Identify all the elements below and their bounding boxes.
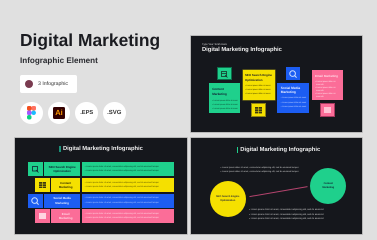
card heading: Marketing	[212, 92, 227, 96]
badge: SVG	[103, 102, 126, 124]
description: ▪ Lorem ipsum dolor sit amet, consectetur adipiscing elit, sed do eiusmod tempor	[85, 166, 159, 168]
card heading: Content	[212, 87, 224, 91]
label: Content	[60, 181, 71, 185]
card: Email Marketing	[312, 70, 343, 100]
subheading: Infographic Element: Infographic Element	[20, 56, 98, 65]
icon box	[28, 194, 43, 208]
text block: lower bullets: ▪ Lorem ipsum dolor sit amet, consectetur adipiscing elit, sed do eiusmod	[249, 209, 324, 211]
text block: lower bullets: ▪ Lorem ipsum dolor sit amet, consectetur adipiscing elit, sed do eiusmod	[249, 218, 324, 220]
panel: row layout infographic	[15, 138, 187, 234]
description: ▪ Lorem ipsum dolor sit amet, consectetur adipiscing elit, sed do eiusmod tempor	[85, 170, 159, 172]
card heading	[212, 87, 227, 96]
chip: 3 Infographic	[20, 75, 77, 92]
circle: Content Marketing: Content	[324, 182, 333, 185]
eyebrow text: Type Your Tenth Here	[202, 42, 227, 46]
heading: Digital Marketing: Digital Marketing	[20, 30, 160, 50]
panel title: Digital Marketing Infographic	[202, 47, 282, 53]
card bullets: ▪ Lorem ipsum dolor sit amet	[281, 102, 306, 104]
icon box: green	[217, 67, 232, 80]
label: Marketing	[55, 201, 69, 205]
Ai tile: Ai	[55, 108, 63, 117]
card bullets: ▪ Lorem ipsum dolor sit amet	[212, 104, 238, 106]
text block: upper bullets	[220, 166, 299, 173]
label: Email	[62, 212, 70, 216]
card bullets: amet elit	[316, 90, 324, 92]
label: Optimization	[53, 169, 71, 173]
text block: lower bullets	[249, 208, 324, 220]
title accent bar	[237, 147, 238, 153]
panel title: Digital Marketing Infographic	[63, 146, 143, 152]
row: SEO	[28, 162, 174, 176]
card bullets: ▪ Lorem ipsum dolor sit amet	[245, 93, 270, 95]
circle: SEO: Optimization	[220, 199, 235, 202]
card bullets	[280, 96, 306, 108]
card bullets: ▪ Lorem ipsum dolor sit	[315, 81, 335, 83]
circle: SEO	[210, 181, 246, 217]
description	[82, 178, 174, 192]
badge: SVG: .SVG	[107, 110, 121, 116]
circle: Content Marketing	[310, 168, 346, 204]
icon box: blue	[286, 67, 300, 80]
Ai tile	[53, 107, 65, 119]
card heading: SEO Search Engine	[245, 73, 272, 77]
card heading: Email Marketing	[315, 74, 338, 78]
text block: lower bullets: ▪ Lorem ipsum dolor sit amet, consectetur adipiscing elit, sed do eiusmod	[249, 214, 324, 216]
description: ▪ Lorem ipsum dolor sit amet, consectetur adipiscing elit, sed do eiusmod tempor	[85, 182, 159, 184]
card bullets: ▪ Lorem ipsum dolor sit amet	[281, 106, 306, 108]
description: ▪ Lorem ipsum dolor sit amet, consectetur adipiscing elit, sed do eiusmod tempor	[85, 217, 159, 219]
card bullets	[245, 84, 270, 95]
text block: upper bullets: ▪ Lorem ipsum dolor sit amet, consectetur adipiscing elit, sed do eiusmod tempor	[220, 171, 299, 173]
description: ▪ Lorem ipsum dolor sit amet, consectetur adipiscing elit, sed do eiusmod tempor	[85, 202, 159, 204]
panel: card layout infographic	[190, 36, 362, 132]
card: Content Marketing	[209, 83, 240, 113]
card bullets: ▪ Lorem ipsum dolor sit amet	[281, 97, 306, 99]
icon: Figma	[20, 102, 43, 124]
row: Content Marketing	[35, 178, 174, 192]
label	[44, 162, 80, 176]
row: Social Media Marketing	[28, 194, 174, 208]
panel title: Digital Marketing Infographic	[240, 147, 320, 153]
icon box	[35, 178, 50, 192]
card bullets	[212, 100, 238, 110]
card heading	[245, 73, 272, 82]
chip label: 3 Infographic	[38, 81, 68, 87]
label: Marketing	[59, 185, 72, 189]
badge: EPS	[75, 102, 98, 124]
description: ▪ Lorem ipsum dolor sit amet, consectetur adipiscing elit, sed do eiusmod tempor	[85, 186, 159, 188]
icon box	[35, 209, 50, 223]
title accent bar	[59, 146, 61, 152]
icon box	[28, 162, 43, 176]
card heading: Social Media	[281, 86, 300, 90]
card bullets: ▪ Lorem ipsum dolor sit amet	[212, 100, 238, 102]
card bullets: amet elit	[316, 84, 324, 86]
card bullets: ▪ Lorem ipsum dolor sit	[315, 87, 335, 89]
card: Social Media Marketing	[277, 83, 309, 113]
card bullets: ▪ Lorem ipsum dolor sit amet	[245, 85, 270, 87]
icon: Adobe Illustrator	[48, 102, 70, 124]
label	[51, 178, 80, 192]
card bullets: ▪ Lorem ipsum dolor sit	[315, 93, 335, 95]
panel: circle comparison infographic	[190, 138, 362, 234]
circle: SEO: SEO Search Engine	[216, 195, 239, 198]
label	[44, 194, 80, 208]
label: Social Media	[53, 196, 71, 200]
row: Email Marketing	[35, 209, 174, 223]
card bullets: ▪ Lorem ipsum dolor sit amet	[245, 89, 270, 91]
card bullets: ▪ Lorem ipsum dolor sit amet	[212, 108, 238, 110]
description: ▪ Lorem ipsum dolor sit amet, consectetur adipiscing elit, sed do eiusmod tempor	[85, 197, 159, 199]
label: SEO Search Engine	[49, 165, 76, 169]
badge: EPS: .EPS	[80, 110, 93, 116]
description	[82, 194, 174, 208]
circle: Content Marketing: Marketing	[322, 186, 334, 189]
icon box: yellow	[251, 103, 266, 117]
icon: check badge	[25, 80, 33, 88]
description	[82, 209, 174, 223]
description: ▪ Lorem ipsum dolor sit amet, consectetur adipiscing elit, sed do eiusmod tempor	[85, 213, 159, 215]
connector line	[249, 186, 308, 198]
card heading: Optimization	[245, 78, 263, 82]
card heading	[280, 86, 300, 94]
icon box: pink	[320, 103, 335, 117]
label: Marketing	[59, 216, 72, 220]
description	[82, 162, 174, 176]
label	[51, 209, 80, 223]
text block: upper bullets: ▪ Lorem ipsum dolor sit amet, consectetur adipiscing elit, sed do eiusmod tempor	[220, 167, 299, 169]
card bullets	[315, 80, 336, 98]
card heading: Marketing	[281, 90, 296, 94]
card: SEO Search Engine Optimization	[243, 70, 275, 100]
card bullets: amet elit	[316, 96, 324, 98]
